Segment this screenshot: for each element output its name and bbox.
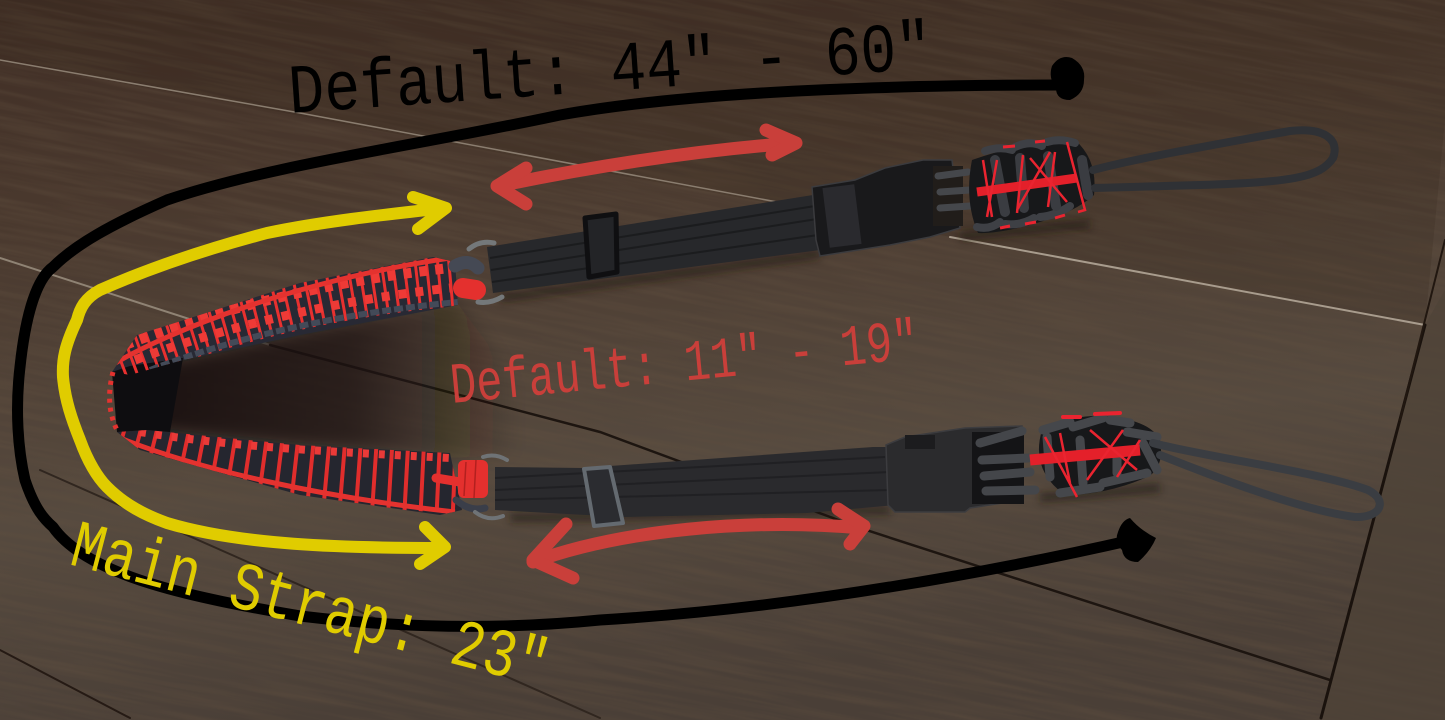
lower end knot — [458, 460, 488, 498]
red bend edge stitches — [110, 372, 118, 432]
main strap: braided paracord section — [110, 257, 488, 515]
yellow arrow: main strap length — [63, 197, 446, 564]
lower cord loop — [1153, 443, 1380, 517]
upper knot — [969, 140, 1095, 233]
D-ring — [475, 456, 507, 518]
upper end knot — [455, 262, 478, 268]
lower buckle — [886, 426, 1035, 512]
slider — [585, 214, 617, 277]
black label: default total length: Default: 44" - 60" — [286, 11, 935, 135]
lower adjustable webbing strap with slider — [475, 447, 895, 526]
upper adjustable webbing strap with slider — [469, 195, 820, 302]
D-ring — [469, 242, 502, 302]
upper cord loop — [1093, 130, 1335, 188]
strap underside at the bend — [112, 358, 183, 432]
red label: default adjustable length: Default: 11" - 19" — [447, 311, 922, 421]
upper buckle — [812, 160, 970, 256]
lower knot — [1030, 413, 1161, 497]
lower braid — [117, 430, 462, 515]
slider — [584, 467, 623, 526]
red arrow: lower adjustable range — [533, 509, 864, 578]
upper braid — [112, 257, 458, 375]
black arrow: total length — [18, 57, 1156, 626]
red arrow: upper adjustable range — [497, 130, 796, 204]
shadow inside the strap U — [140, 224, 1160, 518]
